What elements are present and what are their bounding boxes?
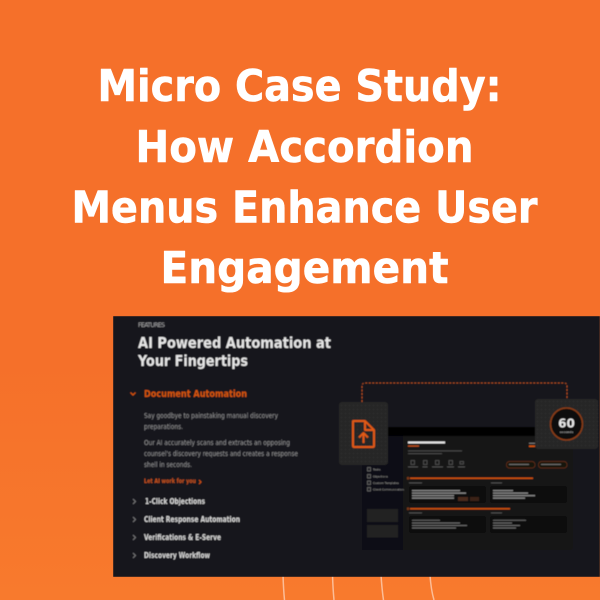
sidebar menu: Objections [373, 474, 388, 478]
decorative curved lines [283, 575, 434, 600]
dashboard filter pills [506, 462, 567, 468]
accordion: collapsed items: 1-Click Objections [145, 497, 205, 506]
accordion: collapsed items: Discovery Workflow [144, 551, 210, 560]
accordion: open item: shell in seconds. [144, 461, 192, 469]
title: How Accordion [136, 123, 474, 173]
dashboard tool icons [408, 460, 465, 467]
accordion: open item: Let AI work for you [144, 477, 196, 485]
accordion: open item: Our AI accurately scans and extracts an opposing [144, 439, 290, 447]
panel heading [137, 334, 331, 370]
dashed connector [362, 383, 567, 402]
title: Engagement [160, 244, 448, 294]
accordion: collapsed items: Verifications & E-Serve [144, 533, 221, 542]
panel heading: Your Fingertips [137, 352, 248, 370]
dashboard mockup [362, 427, 573, 550]
timer badge: 60 [558, 416, 575, 430]
title: Menus Enhance User [72, 184, 538, 234]
icon: file upload [353, 421, 374, 447]
accordion: collapsed items: Client Response Automation [144, 515, 240, 524]
sidebar menu [367, 468, 404, 538]
sidebar menu: Tasks [372, 468, 381, 472]
accordion: open item: Say goodbye to painstaking manual discovery [144, 412, 278, 420]
features label: FEATURES [138, 322, 165, 329]
accordion: open item: Document Automation [144, 389, 247, 400]
upload card [339, 402, 388, 465]
panel: product screenshot [113, 316, 600, 577]
timer badge [550, 408, 582, 440]
title [72, 62, 538, 294]
sidebar menu: Client Communication [373, 488, 404, 492]
accordion: open item: preparations. [144, 423, 183, 431]
dashboard header [408, 442, 535, 454]
timer badge: seconds [560, 430, 574, 434]
accordion: collapsed items [133, 497, 240, 560]
accordion: open item: counsel's discovery requests and creates a response [144, 450, 298, 458]
panel heading: AI Powered Automation at [138, 334, 331, 352]
dashboard section two [407, 508, 567, 533]
title: Micro Case Study: [98, 62, 502, 112]
timer card [535, 399, 598, 449]
dashboard section one [407, 477, 567, 503]
sidebar menu: Custom Templates [373, 481, 399, 485]
accordion: open item [130, 389, 298, 485]
